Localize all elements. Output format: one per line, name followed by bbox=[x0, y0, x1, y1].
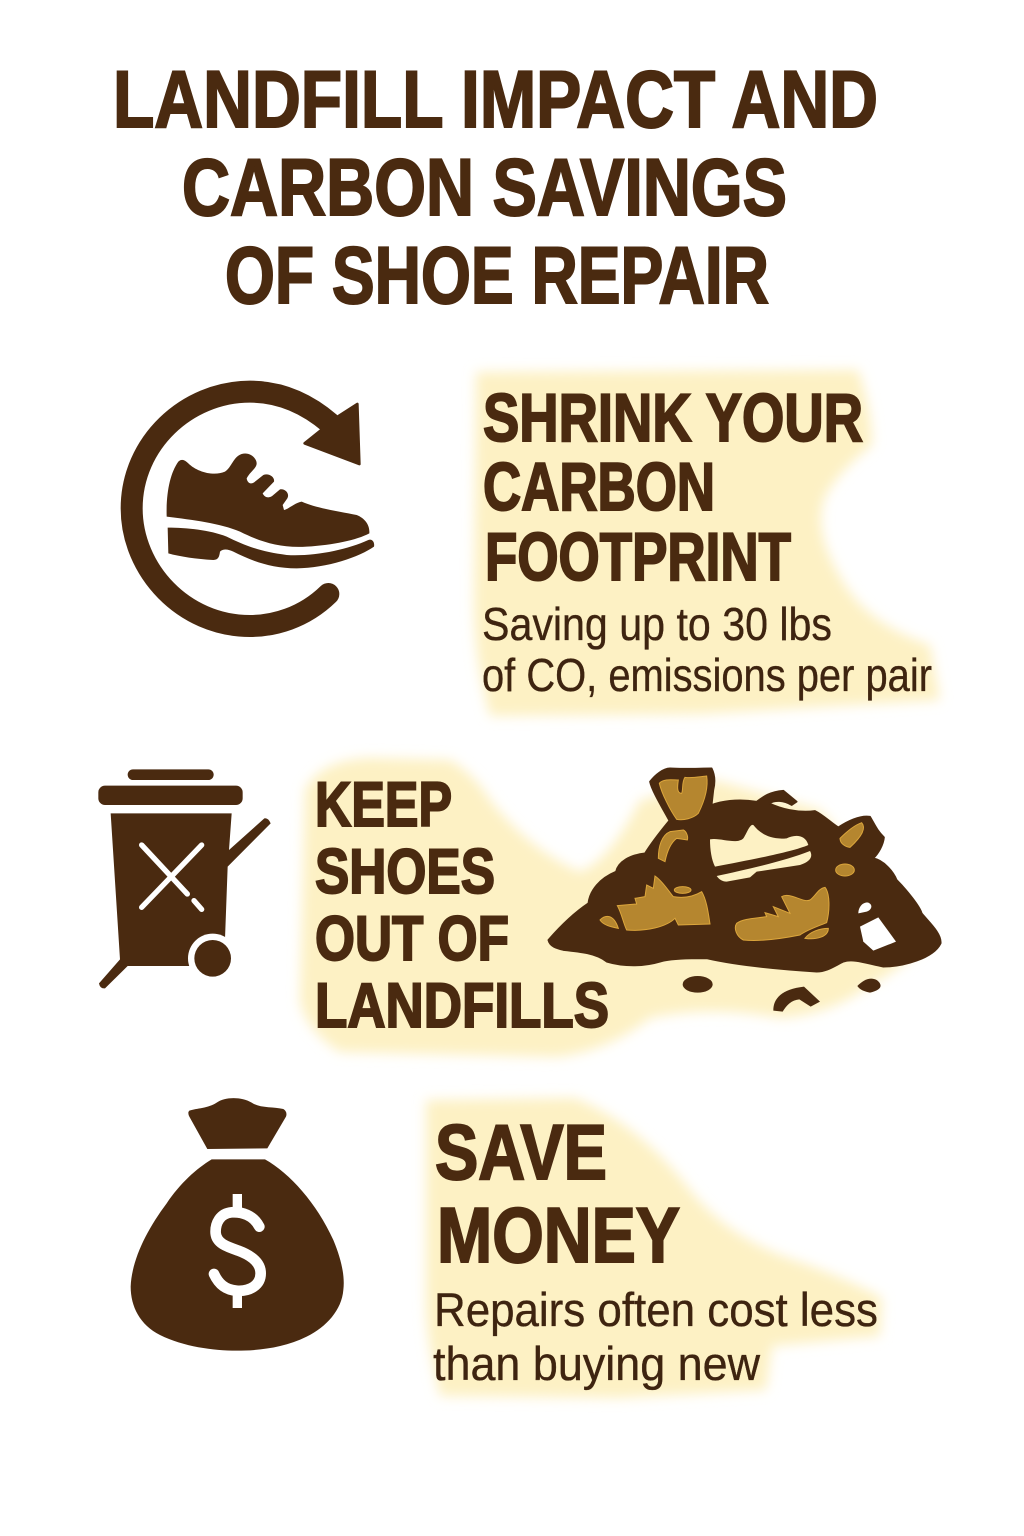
heading: keep shoes out of landfills: KEEP bbox=[315, 770, 452, 840]
title bbox=[113, 55, 878, 321]
heading: shrink your carbon footprint: FOOTPRINT bbox=[485, 519, 791, 595]
highlight: carbon text background bbox=[474, 370, 940, 716]
text: repair cost detail: Repairs often cost less bbox=[434, 1283, 878, 1336]
heading: keep shoes out of landfills: OUT OF bbox=[315, 904, 509, 974]
title: OF SHOE REPAIR bbox=[225, 231, 769, 321]
heading: shrink your carbon footprint: CARBON bbox=[483, 449, 715, 525]
panel: keep shoes out of landfills bbox=[98, 758, 941, 1057]
heading: shrink your carbon footprint bbox=[483, 380, 863, 595]
heading: save money: SAVE bbox=[435, 1108, 607, 1196]
heading: save money bbox=[435, 1108, 680, 1279]
heading: keep shoes out of landfills: LANDFILLS bbox=[315, 971, 609, 1041]
heading: shrink your carbon footprint: SHRINK YOUR bbox=[483, 380, 863, 456]
highlight: money text background bbox=[426, 1098, 882, 1398]
text: repair cost detail bbox=[433, 1283, 878, 1390]
icon: crossed-out wheelie bin bbox=[98, 769, 271, 988]
title: LANDFILL IMPACT AND bbox=[113, 55, 878, 145]
icon: shoe in circular arrow bbox=[132, 392, 374, 626]
title: CARBON SAVINGS bbox=[182, 143, 787, 233]
heading: keep shoes out of landfills: SHOES bbox=[315, 837, 495, 907]
panel: shrink your carbon footprint bbox=[132, 370, 940, 716]
panel: save money bbox=[131, 1098, 882, 1398]
icon: landfill pile with shoes bbox=[548, 768, 941, 1012]
text: repair cost detail: than buying new bbox=[433, 1337, 761, 1390]
text: carbon savings detail bbox=[482, 598, 932, 701]
heading: keep shoes out of landfills bbox=[315, 770, 609, 1041]
heading: save money: MONEY bbox=[437, 1191, 680, 1279]
highlight: landfill text background bbox=[300, 758, 930, 1057]
icon: money bag bbox=[131, 1098, 344, 1351]
text: carbon savings detail: Saving up to 30 lbs bbox=[482, 598, 832, 650]
text: carbon savings detail: of CO, emissions per pair bbox=[482, 649, 932, 701]
